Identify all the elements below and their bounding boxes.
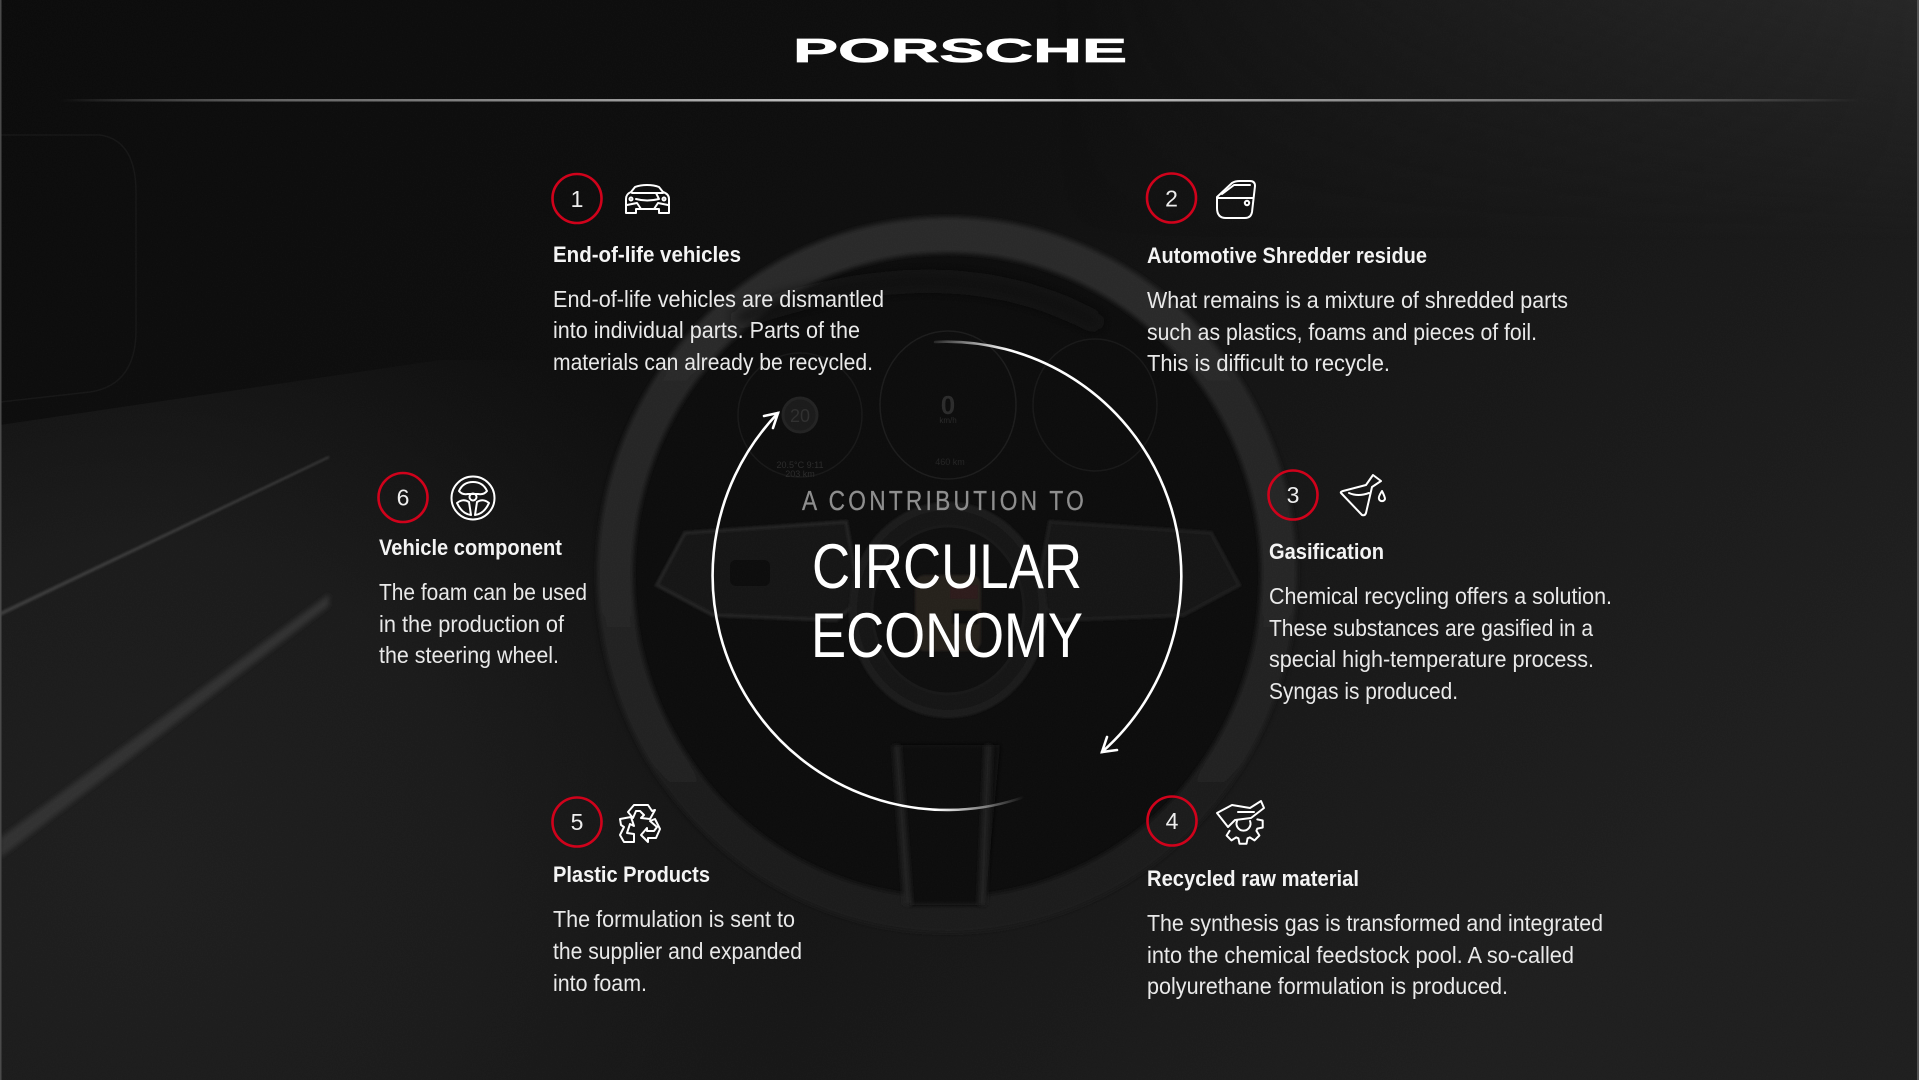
body text: The formulation is sent to: [553, 906, 795, 932]
door panel: [0, 135, 1020, 1080]
number badge 1: 1: [571, 186, 583, 212]
steering wheel: 20.5°C 9:11: [777, 460, 823, 470]
arc arrow: lower-left rising to top-left: [713, 413, 1024, 810]
steering wheel: km/h: [939, 416, 957, 425]
icon: recycling arrows: [620, 805, 660, 842]
body text: [1147, 287, 1568, 376]
body text: [553, 906, 802, 996]
headline: circular: CIRCULAR: [812, 532, 1082, 602]
headline: economy: ECONOMY: [811, 601, 1083, 671]
step 3: gasification: [1268, 470, 1612, 704]
steering wheel: 203 km: [785, 469, 815, 479]
number badge 4: 4: [1166, 808, 1179, 834]
body text: This is difficult to recycle.: [1147, 350, 1390, 376]
body text: the supplier and expanded: [553, 938, 802, 964]
heading: End-of-life vehicles: [553, 242, 741, 267]
body text: The synthesis gas is transformed and integrated: [1147, 910, 1603, 936]
instrument dials: [738, 331, 1157, 479]
body text: into foam.: [553, 970, 647, 996]
center title: [802, 485, 1087, 671]
body text: into the chemical feedstock pool. A so-called: [1147, 942, 1574, 968]
step 2: automotive shredder residue: [1147, 174, 1568, 376]
step 4: recycled raw material: [1147, 796, 1603, 999]
icon: steering wheel: [452, 476, 494, 520]
body text: in the production of: [379, 611, 565, 637]
number badge 5: [552, 798, 602, 846]
step 6: vehicle component: [378, 473, 587, 668]
heading: Recycled raw material: [1147, 866, 1359, 891]
icon: car front: [626, 185, 669, 213]
icon: flask with drop: [1341, 475, 1385, 515]
body text: [553, 286, 884, 375]
body text: such as plastics, foams and pieces of foil.: [1147, 319, 1537, 345]
heading: Gasification: [1269, 539, 1384, 564]
body text: the steering wheel.: [379, 642, 559, 668]
heading: Automotive Shredder residue: [1147, 243, 1427, 268]
crest: [915, 575, 981, 651]
body text: The foam can be used: [379, 579, 587, 605]
kicker: a contribution to: A CONTRIBUTION TO: [802, 485, 1087, 516]
number badge 6: [378, 473, 428, 522]
step 1: end-of-life vehicles: [552, 174, 884, 375]
body text: [1147, 910, 1603, 999]
steering wheel: 460 km: [935, 457, 965, 467]
body text: End-of-life vehicles are dismantled: [553, 286, 884, 312]
body text: Chemical recycling offers a solution.: [1269, 583, 1612, 609]
number badge 5: 5: [571, 809, 583, 835]
heading: Vehicle component: [379, 535, 563, 560]
circular arrows ring: [713, 342, 1181, 810]
number badge 2: [1147, 174, 1196, 222]
number badge 1: [552, 174, 602, 223]
arc arrow: top sweeping to lower-right: [935, 342, 1181, 752]
body text: into individual parts. Parts of the: [553, 317, 860, 343]
body text: materials can already be recycled.: [553, 349, 873, 375]
icon: car door: [1217, 181, 1255, 218]
icon: hand with gear: [1217, 801, 1264, 844]
body text: Syngas is produced.: [1269, 678, 1458, 704]
heading: Plastic Products: [553, 862, 710, 887]
number badge 4: [1148, 796, 1196, 846]
body text: [379, 579, 587, 668]
step 5: plastic products: [552, 798, 802, 996]
number badge 3: [1268, 470, 1318, 520]
steering wheel: 0: [941, 390, 955, 420]
number badge 6: 6: [397, 484, 409, 510]
number badge 3: 3: [1287, 482, 1299, 508]
body text: What remains is a mixture of shredded parts: [1147, 287, 1568, 313]
steering wheel: 20: [790, 406, 810, 426]
header divider rule: [60, 99, 1860, 102]
Porsche logo wordmark: PORSCHE: [793, 33, 1127, 70]
body text: [1269, 583, 1612, 704]
body text: polyurethane formulation is produced.: [1147, 973, 1508, 999]
body text: These substances are gasified in a: [1269, 615, 1593, 641]
steering wheel: [602, 232, 1292, 922]
number badge 2: 2: [1165, 186, 1178, 212]
body text: special high-temperature process.: [1269, 646, 1594, 672]
